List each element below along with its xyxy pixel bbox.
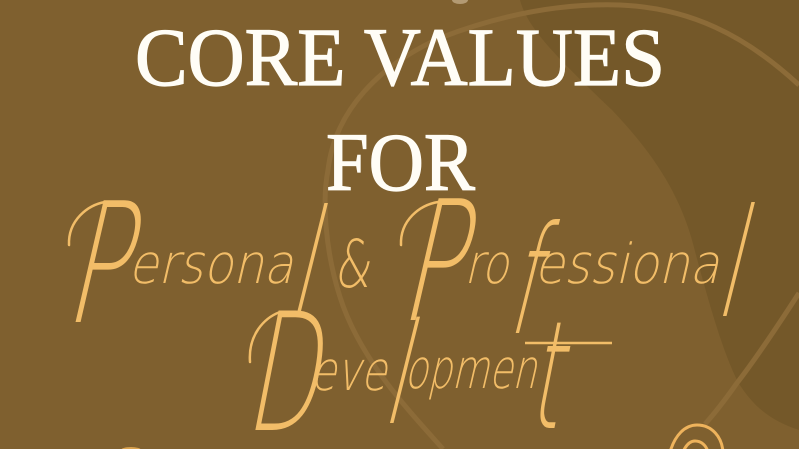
script line: personal and professional: l: [705, 177, 771, 351]
dark organic blob: [520, 0, 799, 430]
script line: development: [236, 278, 612, 449]
script line: personal and professional: l: [278, 178, 344, 352]
script line: personal and professional: ersona: [125, 233, 305, 297]
script line: personal and professional: f: [497, 194, 567, 368]
title line: for: FOR: [326, 116, 476, 208]
script line: personal and professional: &: [332, 225, 379, 303]
script line: personal and professional: [54, 165, 771, 368]
script line: personal and professional: essiona: [531, 233, 731, 297]
icon: spiral ornament: [670, 425, 723, 449]
title line: core values: CORE VALUES: [135, 11, 665, 103]
ring outline: [325, 5, 799, 449]
script line: personal and professional: ro: [461, 233, 520, 297]
script line: development: eve: [307, 340, 398, 404]
top dot: [452, 0, 468, 4]
script line: development: opmen: [401, 338, 548, 402]
script line: personal and professional: P: [54, 167, 161, 361]
bottom left ornament: [121, 447, 141, 449]
script line: personal and professional: P: [389, 165, 496, 359]
